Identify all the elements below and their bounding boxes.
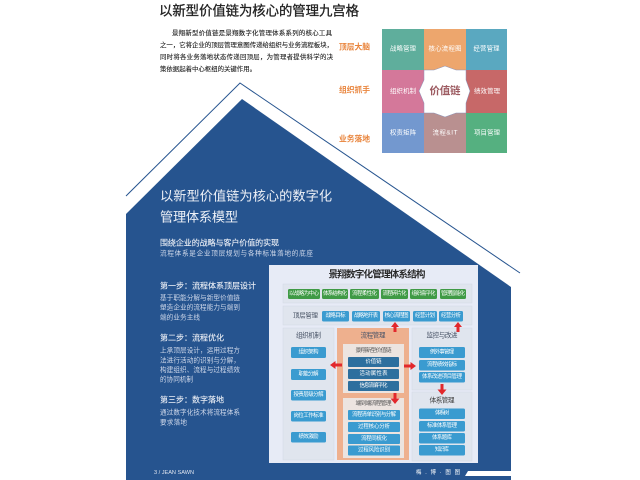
intro paragraph: 景翔新型价值链是景翔数字化管理体系系列的核心工具 — [172, 28, 333, 37]
step two: 构建组织、流程与过程绩效 — [160, 365, 240, 374]
end-to-end block: 端到端流程管理 — [356, 399, 392, 407]
section heading: 以新型价值链为核心的数字化 — [160, 188, 332, 204]
principles row: 管理智能化 — [441, 289, 466, 297]
principles row: 组织扁平化 — [412, 289, 436, 297]
organization mechanism column: 组织机制 — [296, 330, 321, 340]
footer logo: 梅 . 博 · 图 图 — [416, 468, 460, 476]
center value chain shape — [419, 66, 470, 117]
top-level management row: 战略地开表 — [354, 311, 379, 319]
intro paragraph: 同时将各业务落地状态传递回顶层，为管理者提供科学的决 — [160, 52, 334, 61]
step one: 塑造企业的流程能力与端到 — [160, 302, 240, 312]
step three — [160, 394, 240, 426]
end-to-end block: 流程同梳化 — [361, 434, 388, 442]
subheading: 围绕企业的战略与客户价值的实现 — [160, 238, 279, 248]
system management column — [412, 392, 472, 461]
organization mechanism column: 授责层级分解 — [294, 390, 324, 398]
organization mechanism column — [283, 328, 334, 460]
intro paragraph: 策依据起着中心枢纽的关键作用。 — [160, 64, 256, 73]
system management column: 体系树 — [435, 408, 450, 416]
top-level management row: 战略目标 — [326, 311, 346, 319]
top-level management row — [283, 306, 472, 325]
layer labels: 顶层大脑 — [339, 42, 370, 52]
red flow arrows — [330, 322, 462, 404]
end-to-end block — [343, 398, 404, 458]
process management column — [337, 328, 409, 460]
principles row: 体系结构化 — [323, 289, 348, 297]
value chain block: 景翔新型价值链 — [356, 346, 392, 354]
top-level management row: 核心流程图 — [384, 311, 408, 319]
value chain block — [343, 344, 404, 393]
principles row: 流程柔性化 — [352, 289, 378, 297]
step three: 要求落地 — [160, 418, 187, 426]
system management column: 知识库 — [435, 445, 450, 453]
page footer: 3 / JEAN SAWN — [154, 470, 194, 476]
value chain block: 信息流编平化 — [360, 381, 388, 389]
intro paragraph: 之一，它将企业的顶层管理意图传递给组织与业务流程板块， — [160, 40, 333, 49]
monitoring and improvement column: 监控与改进 — [426, 330, 458, 340]
system management column: 体系题库 — [432, 433, 453, 441]
section heading — [160, 188, 332, 224]
end-to-end block: 过程核心分析 — [358, 422, 391, 430]
intro paragraph — [160, 28, 334, 73]
roof outline — [126, 83, 520, 273]
step three: 第三步：数字落地 — [160, 394, 224, 404]
end-to-end block: 过程风险识别 — [358, 446, 390, 454]
monitoring and improvement column: 例外事管理 — [430, 348, 455, 356]
process management column: 流程管理 — [360, 330, 386, 340]
monitoring and improvement column — [412, 328, 472, 390]
organization mechanism column: 绩效激励 — [298, 432, 319, 440]
principles row: 以战略为中心 — [289, 289, 320, 297]
subheading: 流程体系是企业顶层规划与各种标准落地的底座 — [160, 248, 313, 258]
nine-box grid: 经营管理 — [474, 44, 500, 52]
nine-box grid: 权责矩阵 — [390, 128, 417, 136]
diagram title: 景翔数字化管理体系结构 — [328, 268, 426, 280]
blue house body — [126, 99, 511, 480]
nine-box grid: 价值链 — [430, 84, 461, 97]
subheading — [160, 238, 313, 258]
organization mechanism column: 岗位工作标准 — [294, 411, 324, 419]
step one: 基于职能分解与新型价值链 — [160, 293, 240, 302]
title: 以新型价值链为核心的管理九宫格 — [159, 4, 360, 18]
top-level management row: 顶层管理 — [293, 310, 319, 320]
top-level management row: 经营计划 — [415, 311, 435, 319]
footer logo — [416, 468, 511, 476]
monitoring and improvement column: 体系改进项目管理 — [422, 372, 463, 380]
step three: 通过数字化技术将流程体系 — [160, 408, 240, 416]
section heading: 管理体系模型 — [160, 210, 238, 224]
step two: 上承顶层设计，运用过程方 — [160, 346, 240, 354]
value chain block: 活动属性表 — [360, 369, 388, 377]
principles row: 流程碎片化 — [382, 289, 407, 297]
step one: 第一步：流程体系顶层设计 — [160, 280, 256, 290]
system management column: 体系管理 — [430, 396, 455, 404]
nine-box grid: 战略管理 — [390, 44, 417, 52]
step one — [160, 280, 256, 322]
layer labels — [339, 42, 370, 144]
organization mechanism column: 职能分解 — [298, 370, 319, 378]
nine-box grid: 项目管理 — [474, 128, 501, 136]
layer labels: 业务落地 — [339, 134, 370, 144]
step two: 的协同机制 — [160, 374, 193, 384]
structure diagram panel — [269, 265, 478, 463]
top-level management row: 经营分析 — [441, 311, 462, 319]
step two: 第二步：流程优化 — [160, 332, 224, 342]
step two: 法进行活动的识别与分解， — [160, 356, 240, 364]
nine-box grid: 核心流程图 — [428, 44, 462, 52]
end-to-end block: 流程清单识别与分解 — [352, 410, 397, 418]
nine-box grid — [382, 29, 507, 153]
monitoring and improvement column: 流程绩效指标 — [427, 360, 458, 368]
step two — [160, 332, 240, 384]
nine-box grid: 绩效管理 — [474, 86, 501, 95]
system management column: 标准体系管理 — [427, 421, 458, 429]
step one: 端的业务主线 — [160, 312, 200, 322]
nine-box grid: 流程&IT — [432, 128, 458, 136]
value chain block: 价值链 — [366, 357, 382, 365]
layer labels: 组织抓手 — [339, 84, 370, 94]
principles row — [283, 284, 472, 303]
organization mechanism column: 组织架构 — [298, 348, 319, 356]
nine-box grid: 组织机制 — [390, 86, 416, 95]
